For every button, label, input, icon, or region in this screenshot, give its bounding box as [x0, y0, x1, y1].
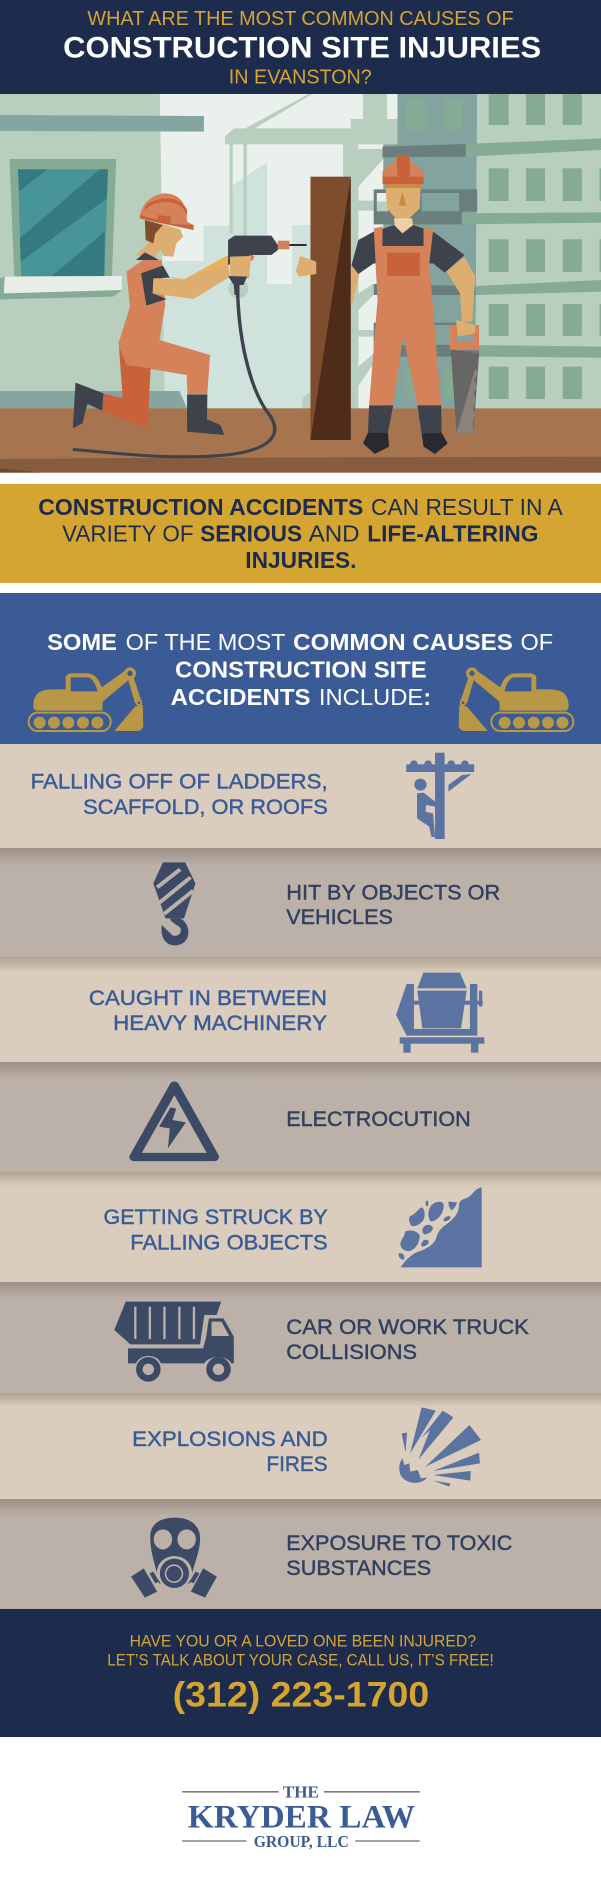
- floor: [0, 408, 601, 473]
- statement text: LIFE-ALTERING: [367, 520, 538, 546]
- heading: line one: WHAT ARE THE MOST COMMON CAUSES OF: [87, 8, 514, 30]
- row text: GETTING STRUCK BY: [104, 1205, 328, 1229]
- icon: worker on utility pole: [406, 753, 474, 839]
- row text: FALLING OFF OF LADDERS,: [31, 769, 328, 793]
- call to action second line: LET’S TALK ABOUT YOUR CASE, CALL US, IT’S FREE!: [107, 1651, 494, 1670]
- intro heading: [47, 629, 553, 710]
- logo: [182, 1783, 420, 1851]
- wooden post: [310, 177, 351, 440]
- row text: FIRES: [266, 1452, 328, 1476]
- statement text: VARIETY OF: [62, 520, 194, 546]
- right buildings with windows: [374, 94, 601, 408]
- intro heading: OF: [520, 629, 553, 655]
- row text: EXPLOSIONS AND: [132, 1427, 328, 1451]
- footer call to action: [0, 1609, 601, 1737]
- phone number: (312) 223-1700: [173, 1676, 429, 1714]
- row text: [31, 769, 328, 819]
- icon: left excavator: [29, 667, 143, 731]
- call to action text: HAVE YOU OR A LOVED ONE BEEN INJURED?: [130, 1632, 476, 1651]
- row: collisions: [0, 1282, 601, 1393]
- intro heading: CONSTRUCTION SITE: [175, 656, 427, 682]
- kneeling worker with drill: [73, 193, 307, 435]
- standing worker with saw: [296, 155, 479, 454]
- hero illustration: two construction workers: [0, 94, 601, 473]
- statement text: CAN RESULT IN A: [371, 494, 563, 520]
- statement text: CONSTRUCTION ACCIDENTS: [38, 494, 363, 520]
- icon: rockslide: [398, 1187, 482, 1267]
- row: falling: [0, 744, 601, 848]
- left building: [0, 94, 204, 408]
- logo: GROUP, LLC: [254, 1832, 349, 1851]
- row: explosions: [0, 1393, 601, 1499]
- icon: crane hook: [153, 862, 195, 945]
- intro heading: SOME: [47, 629, 117, 655]
- row text: CAR OR WORK TRUCK: [286, 1315, 530, 1339]
- icon: right excavator: [459, 667, 573, 731]
- blue intro panel: [0, 593, 601, 744]
- row text: SUBSTANCES: [286, 1556, 431, 1580]
- background city silhouettes: [163, 94, 399, 414]
- intro heading: OF THE MOST: [126, 629, 286, 655]
- heading: main title: CONSTRUCTION SITE INJURIES: [63, 31, 541, 64]
- statement text: [38, 494, 563, 573]
- row: struck by falling objects: [0, 1172, 601, 1282]
- row text: FALLING OBJECTS: [130, 1230, 328, 1254]
- icon: gas mask: [131, 1518, 217, 1598]
- row: hit by objects: [0, 848, 601, 957]
- heading: location: IN EVANSTON?: [229, 66, 372, 88]
- statement text: AND: [309, 520, 360, 546]
- row text: VEHICLES: [286, 905, 393, 929]
- row text: [286, 1315, 530, 1364]
- row text: [104, 1205, 328, 1254]
- row text: CAUGHT IN BETWEEN: [89, 986, 327, 1010]
- icon: explosion: [399, 1407, 481, 1487]
- statement text: INJURIES.: [245, 547, 356, 573]
- row text: ELECTROCUTION: [286, 1107, 471, 1131]
- row text: EXPOSURE TO TOXIC: [286, 1531, 512, 1555]
- icon: cement mixer: [396, 973, 484, 1053]
- logo: KRYDER LAW: [188, 1799, 415, 1835]
- icon: high voltage warning: [134, 1086, 214, 1157]
- statement text: SERIOUS: [200, 520, 302, 546]
- gold statement band: [0, 484, 601, 583]
- row text: [286, 1531, 512, 1580]
- logo: THE: [283, 1783, 319, 1802]
- header panel: [0, 0, 601, 94]
- row text: SCAFFOLD, OR ROOFS: [83, 795, 328, 819]
- row text: HEAVY MACHINERY: [113, 1011, 327, 1035]
- row text: COLLISIONS: [286, 1340, 417, 1364]
- intro heading: INCLUDE:: [319, 684, 431, 710]
- intro heading: ACCIDENTS: [171, 684, 310, 710]
- row text: HIT BY OBJECTS OR: [286, 880, 500, 904]
- row: toxic substances: [0, 1499, 601, 1609]
- row: caught in machinery: [0, 957, 601, 1062]
- row text: [132, 1427, 328, 1476]
- drill cord: [73, 293, 275, 457]
- icon: dump truck: [114, 1302, 234, 1382]
- row: electrocution: [0, 1062, 601, 1172]
- intro heading: COMMON CAUSES: [293, 629, 513, 655]
- row text: [286, 880, 500, 929]
- row text: [89, 986, 327, 1035]
